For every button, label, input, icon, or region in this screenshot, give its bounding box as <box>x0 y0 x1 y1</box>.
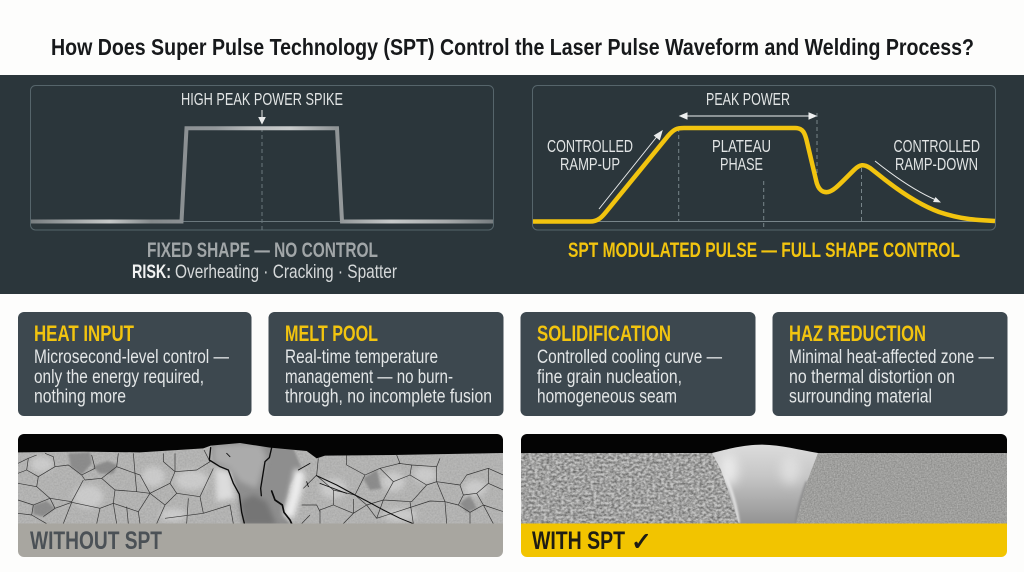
label bar: with SPT <box>521 524 1007 557</box>
label: without SPT: WITHOUT SPT <box>30 527 162 555</box>
label: controlled ramp-up <box>547 136 633 174</box>
panel: without SPT micrograph <box>18 434 503 557</box>
text: heat input description: only the energy required, <box>34 366 204 388</box>
text: heat input description: Microsecond-level control — <box>34 346 229 368</box>
chart frame: SPT pulse <box>532 86 996 230</box>
panel: SPT modulated pulse waveform <box>532 86 996 262</box>
label: plateau phase <box>712 136 771 174</box>
text: risks: RISK: <box>132 261 171 283</box>
label: controlled ramp-up: RAMP-UP <box>560 154 620 174</box>
label: with SPT: WITH SPT <box>532 527 625 555</box>
micrograph: black background <box>18 434 503 458</box>
label: controlled ramp-down: CONTROLLED <box>894 136 980 156</box>
chart guide lines <box>181 128 342 230</box>
heading: HAZ reduction: HAZ REDUCTION <box>789 321 926 346</box>
text: HAZ description <box>789 346 994 408</box>
micrograph: weld seam <box>712 445 818 523</box>
text: solidification description <box>537 346 722 408</box>
label: plateau phase: PHASE <box>720 154 763 174</box>
heading: fixed shape: FIXED SHAPE — NO CONTROL <box>147 238 378 262</box>
label: controlled ramp-up: CONTROLLED <box>547 136 633 156</box>
micrograph: coarse grain base metal <box>521 453 771 524</box>
chart guide lines <box>595 113 995 230</box>
chart: SPT waveform line <box>533 128 995 222</box>
label bar: without SPT <box>18 524 503 557</box>
text: melt pool description <box>285 346 492 408</box>
micrograph: fine grain base metal <box>760 453 1007 524</box>
panel: waveform comparison band <box>0 75 1024 294</box>
panel: with SPT micrograph <box>521 434 1007 557</box>
label: controlled ramp-down <box>894 136 980 174</box>
heading: heat input: HEAT INPUT <box>34 321 134 346</box>
chart frame: fixed pulse <box>30 86 494 230</box>
arrow: peak power span <box>680 113 816 119</box>
panel: solidification <box>520 312 756 416</box>
arrow: ramp-up <box>599 131 662 209</box>
text: risk list: Overheating · Cracking · Spatter <box>175 261 397 283</box>
text: melt pool description: through, no incomplete fusion <box>285 386 492 408</box>
label: controlled ramp-down: RAMP-DOWN <box>895 154 978 174</box>
label: peak power: PEAK POWER <box>706 89 790 109</box>
heading: solidification: SOLIDIFICATION <box>537 321 671 346</box>
grain boundaries <box>18 450 503 524</box>
label: high peak power spike: HIGH PEAK POWER SPIKE <box>181 89 343 109</box>
grains: darker patches <box>33 452 477 517</box>
text: melt pool description: management — no burn- <box>285 366 453 388</box>
panel: HAZ reduction <box>772 312 1008 416</box>
label: plateau phase: PLATEAU <box>712 136 771 156</box>
heading: melt pool: MELT POOL <box>285 321 378 346</box>
text: solidification description: Controlled cooling curve — <box>537 346 722 368</box>
icon: check mark: ✓ <box>631 527 652 556</box>
arrow: spike pointer <box>259 110 265 124</box>
weld zone <box>211 442 302 525</box>
text: heat input description <box>34 346 229 408</box>
arrow: ramp-down <box>875 161 941 202</box>
chart: fixed pulse waveform line <box>31 128 493 222</box>
major cracks <box>209 448 413 524</box>
text: solidification description: homogeneous seam <box>537 386 677 408</box>
text: solidification description: fine grain nucleation, <box>537 366 682 388</box>
panel: heat input <box>18 312 252 416</box>
micrograph: cracked metal <box>18 442 503 525</box>
micrograph: black background <box>521 434 1007 453</box>
text: HAZ description: no thermal distortion on <box>789 366 955 388</box>
panel: fixed pulse waveform <box>30 86 494 283</box>
panel: melt pool <box>268 312 504 416</box>
text: HAZ description: surrounding material <box>789 386 932 408</box>
text: melt pool description: Real-time temperature <box>285 346 438 368</box>
text: heat input description: nothing more <box>34 386 126 408</box>
grain highlights <box>30 456 487 522</box>
